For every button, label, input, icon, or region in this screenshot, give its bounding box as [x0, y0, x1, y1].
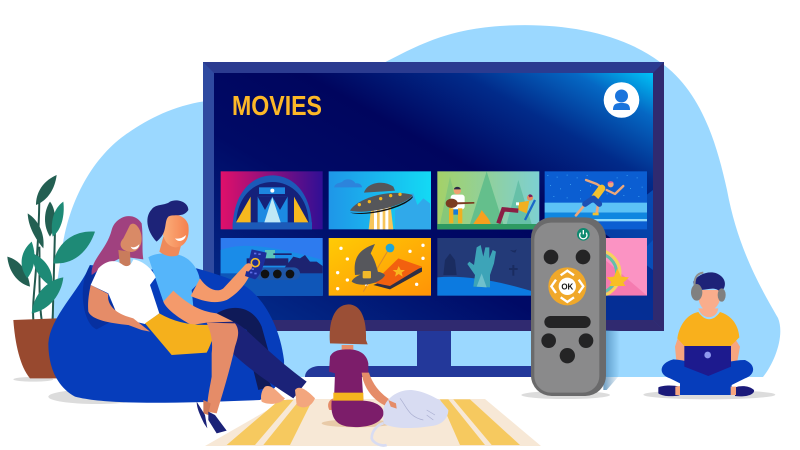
woman hair — [92, 216, 143, 275]
cat — [372, 390, 448, 445]
boy with laptop — [643, 272, 775, 399]
TV bezel — [203, 62, 664, 331]
TV screen — [214, 73, 653, 320]
thumbnails grid — [221, 171, 647, 297]
man legs — [207, 308, 315, 407]
boy arms — [675, 333, 740, 365]
plant leaves — [7, 175, 95, 313]
boy feet — [658, 385, 754, 396]
thumbnail: tank — [221, 238, 323, 296]
thumbnail: zombie hand — [437, 238, 539, 296]
girl shadow — [322, 419, 392, 427]
woman skirt — [145, 313, 218, 355]
boy shadow — [643, 390, 775, 399]
OK d-pad: OK — [561, 282, 574, 291]
plant pot — [13, 318, 57, 378]
thumbnail: concert stage — [221, 171, 323, 229]
thumbnail: runner — [545, 171, 647, 229]
icon: profile — [604, 82, 639, 118]
beanbag fold — [83, 265, 120, 329]
girl body — [328, 304, 396, 427]
TV stand — [305, 325, 560, 377]
rug — [205, 399, 541, 446]
beanbag shadow — [48, 389, 145, 404]
thumbnail: campfire — [437, 171, 539, 229]
plant stems — [33, 200, 55, 320]
woman neck — [118, 250, 131, 267]
couple on beanbag — [48, 200, 315, 433]
power button — [577, 228, 590, 241]
remote body — [531, 217, 606, 396]
thumbnail: rainbow star — [606, 238, 647, 296]
man neck and head — [147, 200, 189, 256]
background blob: right — [300, 25, 780, 377]
girl with cat — [322, 304, 448, 445]
remote shadow — [521, 330, 620, 399]
top buttons — [544, 250, 590, 264]
woman legs — [207, 323, 238, 413]
heading: MOVIES: MOVIES — [232, 90, 322, 121]
boy shirt — [677, 312, 739, 347]
headphones — [691, 273, 726, 302]
woman face — [121, 224, 142, 252]
plant — [7, 175, 95, 382]
plant shadow — [13, 377, 53, 382]
beanbag — [48, 265, 284, 403]
TV — [203, 62, 664, 331]
OK d-pad — [548, 267, 586, 305]
man torso — [148, 253, 200, 307]
woman t-shirt — [91, 259, 159, 324]
boy legs — [662, 359, 753, 395]
thumbnail: wizard hat and book — [329, 238, 431, 296]
background blob: left — [40, 100, 320, 377]
bottom buttons — [541, 333, 593, 363]
remote control — [521, 217, 620, 399]
laptop — [684, 346, 731, 376]
man arm — [191, 265, 252, 302]
woman left arm — [88, 285, 150, 332]
boy hair — [693, 272, 725, 292]
remote face — [534, 223, 599, 393]
remote in man's hand — [243, 249, 267, 279]
boy head — [698, 290, 721, 317]
woman heels — [197, 402, 227, 433]
man arm on woman — [163, 291, 233, 325]
long button — [544, 316, 591, 328]
thumbnail: UFO — [329, 171, 431, 229]
